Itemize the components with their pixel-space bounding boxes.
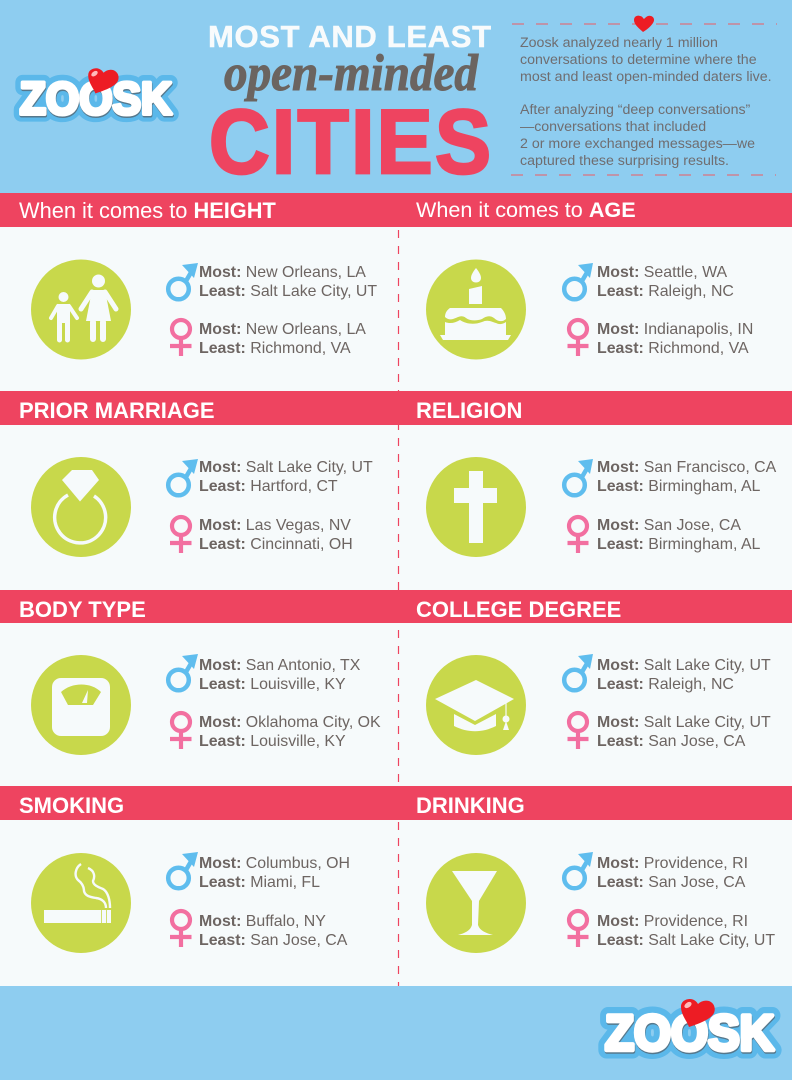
text: female results: Most: Oklahoma City, OK xyxy=(199,714,381,731)
icon: male xyxy=(168,852,198,888)
entry: prior marriage xyxy=(168,459,373,553)
entry: drinking xyxy=(564,852,775,949)
icon: male xyxy=(168,263,198,299)
text: female results: Least: xyxy=(597,536,644,553)
logo: Zoosk bottom right: ZOOSK xyxy=(605,1005,774,1061)
text: male results: Raleigh, NC xyxy=(648,676,734,693)
text: male results: Most: Columbus, OH xyxy=(199,855,350,872)
text: male results: Least: xyxy=(199,283,246,300)
entry: religion xyxy=(564,459,777,553)
heading: religion: RELIGION xyxy=(416,398,522,423)
icon: female xyxy=(170,517,192,553)
intro paragraphs: —conversations that included xyxy=(520,119,706,135)
logo: Zoosk top left: ZOOSK xyxy=(20,75,173,126)
intro paragraphs: captured these surprising results. xyxy=(520,153,729,169)
text: female results: Least: xyxy=(199,340,246,357)
title line: most and least: MOST AND LEAST xyxy=(208,19,491,54)
text: male results: Least: xyxy=(597,478,644,495)
icon: birthday cake xyxy=(426,260,526,360)
text: male results: Least: xyxy=(597,283,644,300)
text: male results: Birmingham, AL xyxy=(648,478,760,495)
icon: height, adult and child xyxy=(31,260,131,360)
icon: diamond ring xyxy=(31,457,131,557)
intro paragraphs: Zoosk analyzed nearly 1 million xyxy=(520,35,718,51)
icon: cross xyxy=(426,457,526,557)
icon: female xyxy=(568,320,588,356)
icon: male xyxy=(168,459,198,495)
center dashed divider xyxy=(398,230,400,986)
text: male results: Most: Seattle, WA xyxy=(597,264,727,281)
text: female results: Salt Lake City, UT xyxy=(648,932,775,949)
icon: heart on dashed line xyxy=(634,16,654,32)
icon: graduation cap xyxy=(426,655,526,755)
title line: open-minded: open-minded xyxy=(224,45,479,102)
heading: college degree: COLLEGE DEGREE xyxy=(416,597,621,622)
icon: female xyxy=(568,713,588,749)
text: female results: Least: xyxy=(597,733,644,750)
text: female results: Least: xyxy=(199,733,246,750)
logo: Zoosk top left: ZOOSK xyxy=(20,73,172,124)
icon: female xyxy=(170,713,192,749)
text: female results: Birmingham, AL xyxy=(648,536,760,553)
text: male results: San Jose, CA xyxy=(648,874,745,891)
icon: female xyxy=(568,517,588,553)
intro paragraphs: After analyzing “deep conversations” xyxy=(520,102,751,118)
text: male results: Least: xyxy=(597,874,644,891)
text: male results: Least: xyxy=(199,478,246,495)
icon: male xyxy=(564,654,593,690)
text: female results: Least: xyxy=(199,932,246,949)
entry: age xyxy=(564,263,753,357)
section bar: height and age xyxy=(0,193,792,227)
entry: height xyxy=(168,263,377,357)
text: male results: Hartford, CT xyxy=(250,478,338,495)
text: female results: San Jose, CA xyxy=(250,932,347,949)
title line: cities: CITIES xyxy=(209,91,491,193)
text: male results: Most: Providence, RI xyxy=(597,855,748,872)
logo: Zoosk bottom right: ZOOSK xyxy=(606,1006,774,1062)
text: female results: San Jose, CA xyxy=(648,733,745,750)
section bar: smoking and drinking xyxy=(0,786,792,820)
icon: male xyxy=(168,654,198,690)
icon: female xyxy=(568,911,588,947)
icon: bathroom scale xyxy=(31,655,131,755)
entry: college degree xyxy=(564,654,771,750)
icon: male xyxy=(564,263,593,299)
heading: drinking: DRINKING xyxy=(416,793,525,818)
text: female results: Most: Indianapolis, IN xyxy=(597,321,753,338)
text: female results: Richmond, VA xyxy=(250,340,351,357)
text: female results: Most: Buffalo, NY xyxy=(199,913,326,930)
entry: smoking xyxy=(168,852,350,949)
text: male results: Most: San Antonio, TX xyxy=(199,657,360,674)
panel: content background xyxy=(0,193,792,986)
intro paragraphs: 2 or more exchanged messages—we xyxy=(520,136,755,152)
text: male results: Most: Salt Lake City, UT xyxy=(597,657,771,674)
icon: cigarette xyxy=(31,853,131,953)
entry: body type xyxy=(168,654,381,750)
heading: smoking: SMOKING xyxy=(19,793,124,818)
text: female results: Least: xyxy=(597,932,644,949)
title xyxy=(208,19,491,193)
section bar: body type and college degree xyxy=(0,590,792,623)
heading: age: When it comes to AGE xyxy=(416,197,636,222)
text: female results: Most: Las Vegas, NV xyxy=(199,517,351,534)
text: female results: Least: xyxy=(199,536,246,553)
heading: body type: BODY TYPE xyxy=(19,597,146,622)
text: female results: Most: Providence, RI xyxy=(597,913,748,930)
intro paragraphs: conversations to determine where the xyxy=(520,52,757,68)
logo: Zoosk top left: ZOOSK xyxy=(20,73,172,124)
text: male results: Most: San Francisco, CA xyxy=(597,459,776,476)
icon: martini glass xyxy=(426,853,526,953)
text: male results: Most: Salt Lake City, UT xyxy=(199,459,373,476)
text: male results: Louisville, KY xyxy=(250,676,346,693)
icon: female xyxy=(170,320,192,356)
text: male results: Miami, FL xyxy=(250,874,320,891)
text: female results: Most: Salt Lake City, UT xyxy=(597,714,771,731)
icon: male xyxy=(564,852,593,888)
text: male results: Least: xyxy=(199,676,246,693)
intro paragraphs: most and least open-minded daters live. xyxy=(520,69,772,85)
icon: female xyxy=(170,911,192,947)
text: female results: Most: New Orleans, LA xyxy=(199,321,366,338)
heading: prior marriage: PRIOR MARRIAGE xyxy=(19,398,215,423)
intro text block xyxy=(511,16,777,175)
text: female results: Most: San Jose, CA xyxy=(597,517,741,534)
section bar: prior marriage and religion xyxy=(0,391,792,425)
icon: male xyxy=(564,459,593,495)
text: female results: Least: xyxy=(597,340,644,357)
text: female results: Cincinnati, OH xyxy=(250,536,353,553)
heading: height: When it comes to HEIGHT xyxy=(19,198,276,223)
text: female results: Richmond, VA xyxy=(648,340,749,357)
text: male results: Salt Lake City, UT xyxy=(250,283,377,300)
logo: Zoosk bottom right: ZOOSK xyxy=(605,1005,774,1061)
text: male results: Raleigh, NC xyxy=(648,283,734,300)
text: male results: Least: xyxy=(199,874,246,891)
text: male results: Most: New Orleans, LA xyxy=(199,264,366,281)
text: female results: Louisville, KY xyxy=(250,733,346,750)
text: male results: Least: xyxy=(597,676,644,693)
